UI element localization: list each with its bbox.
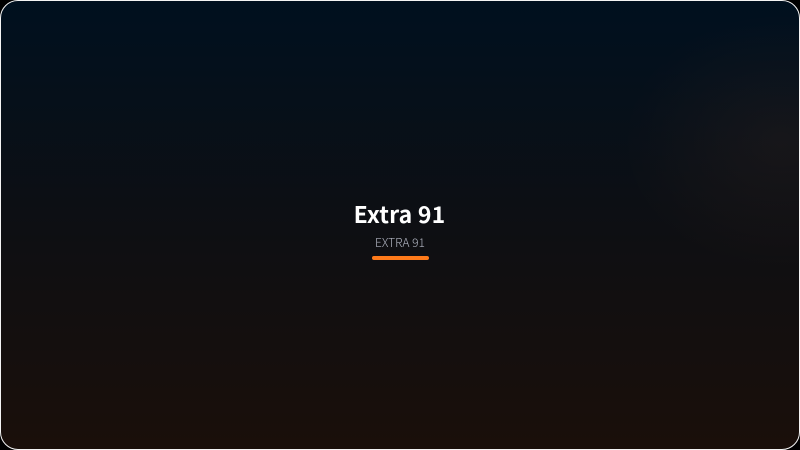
subtitle: EXTRA 91	[375, 234, 425, 251]
accent bar	[372, 256, 429, 260]
title: Extra 91	[354, 196, 445, 230]
background glow	[621, 11, 800, 271]
